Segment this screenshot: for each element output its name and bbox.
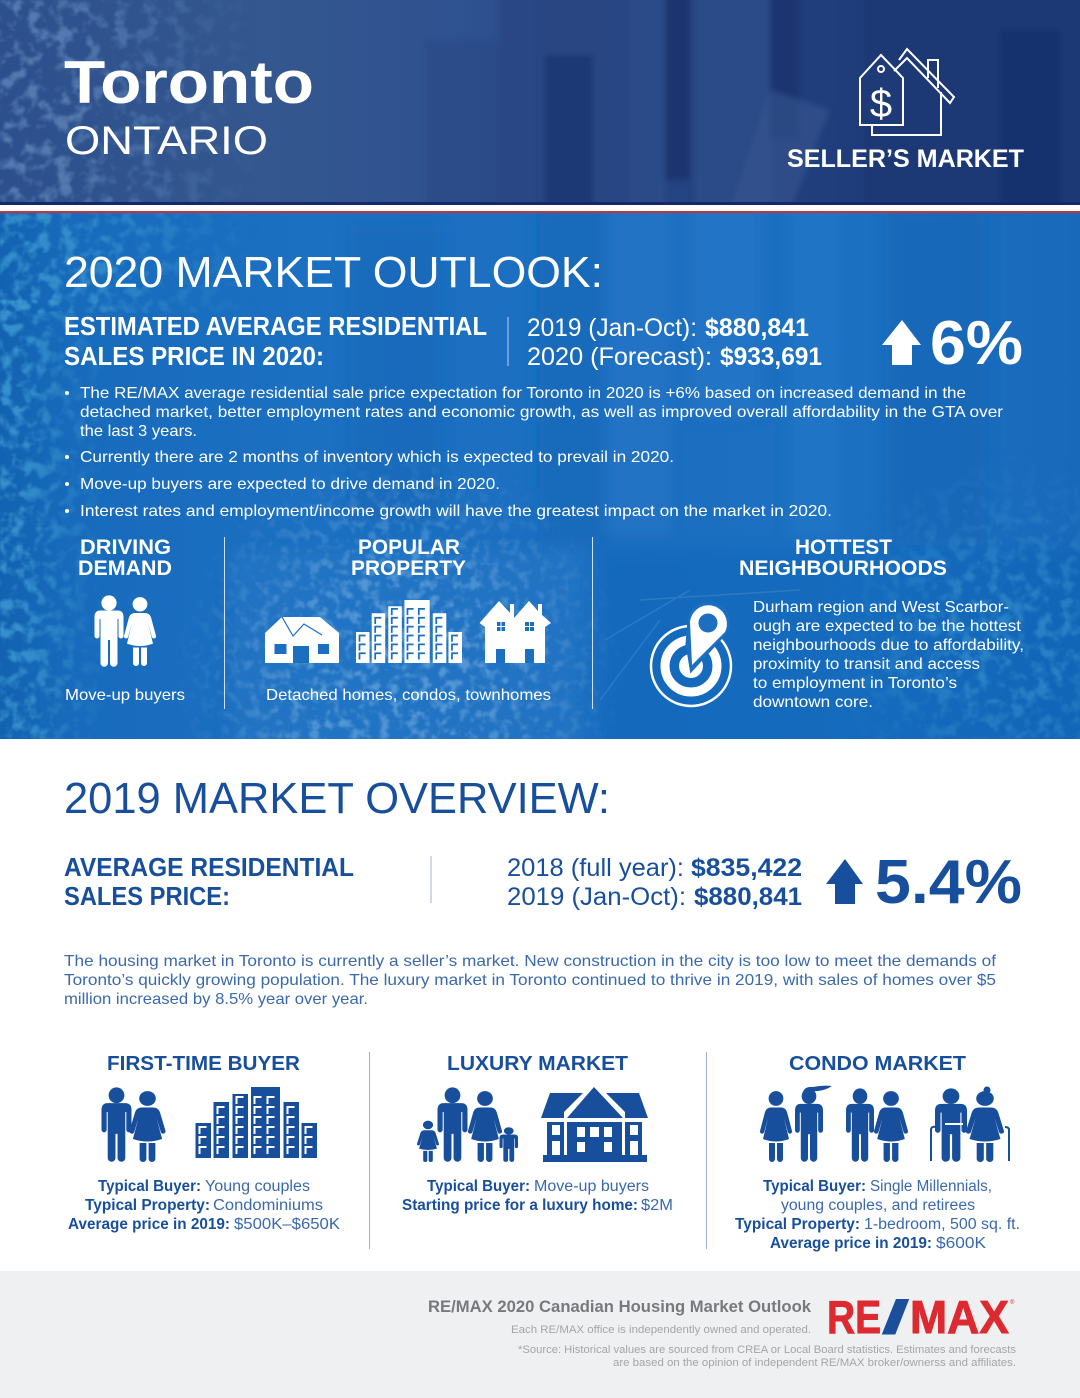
- average price label: SALES PRICE:: [64, 883, 230, 911]
- outlook bullet list: Currently there are 2 months of inventory which is expected to prevail in 2020.: [80, 449, 674, 466]
- details: Typical Buyer:: [763, 1178, 866, 1195]
- outlook bullet list: the last 3 years.: [80, 423, 197, 440]
- stat: 6 percent: 6%: [930, 309, 1023, 378]
- description: ough are expected to be the hottest: [753, 618, 1022, 635]
- heading: [739, 536, 947, 580]
- details: Starting price for a luxury home:: [402, 1197, 638, 1214]
- icon: up arrow: [882, 320, 921, 365]
- heading: CONDO MARKET: [789, 1052, 966, 1075]
- icon: couple: [94, 595, 156, 667]
- source note: are based on the opinion of independent RE/MAX broker/ownerss and affiliates.: [613, 1357, 1016, 1369]
- description: downtown core.: [753, 694, 873, 711]
- details: $600K: [936, 1235, 987, 1252]
- heading: DRIVING: [80, 536, 171, 559]
- details: Move-up buyers: [534, 1178, 649, 1195]
- panel: 2020 market outlook: [0, 205, 1080, 750]
- details: Average price in 2019:: [68, 1216, 230, 1233]
- description: proximity to transit and access: [753, 656, 980, 673]
- estimated average price label: ESTIMATED AVERAGE RESIDENTIAL: [64, 313, 487, 341]
- panel: header banner: [0, 0, 1080, 210]
- logo: RE/MAX: /: [882, 1291, 909, 1343]
- caption: Move-up buyers: [65, 687, 185, 704]
- tree foliage: [0, 0, 214, 202]
- details: $500K–$650K: [234, 1216, 341, 1233]
- icon: up arrow: [826, 859, 863, 904]
- price comparison: 2020 (Forecast):: [527, 343, 712, 371]
- price comparison: 2019 (Jan-Oct):: [507, 883, 686, 911]
- price comparison: 2019 (Jan-Oct):: [527, 314, 697, 342]
- outlook bullet list: [65, 385, 1004, 520]
- outlook bullet list: Move-up buyers are expected to drive demand in 2020.: [80, 476, 500, 493]
- photo background: [0, 205, 1080, 750]
- footer title: RE/MAX 2020 Canadian Housing Market Outlook: [428, 1298, 812, 1316]
- description: [753, 599, 1024, 711]
- icon: condo towers: [356, 600, 462, 663]
- average price label: AVERAGE RESIDENTIAL: [64, 854, 354, 882]
- icon: dollar sign: $: [870, 82, 892, 126]
- outlook bullet list: The RE/MAX average residential sale price expectation for Toronto in 2020 is +6% based on increased demand in the: [80, 385, 966, 402]
- overview paragraph: Toronto’s quickly growing population. The luxury market in Toronto continued to thrive in 2019, with sales of homes over $5: [64, 972, 996, 989]
- panel: first-time buyer: [68, 1052, 341, 1233]
- panel: luxury market: [402, 1052, 673, 1214]
- source note: [518, 1344, 1017, 1369]
- icon: retirees: [931, 1086, 1009, 1162]
- logo: RE/MAX: MAX: [910, 1291, 1009, 1343]
- logo: RE/MAX: RE: [827, 1291, 881, 1343]
- heading: [78, 536, 172, 580]
- title: [64, 49, 314, 163]
- heading: HOTTEST: [795, 536, 892, 559]
- heading: NEIGHBOURHOODS: [739, 557, 947, 580]
- details: Young couples: [205, 1178, 310, 1195]
- details: [68, 1178, 341, 1233]
- icon: map pin on target: [651, 604, 731, 706]
- icon: house with price tag: [860, 49, 954, 135]
- icon: detached house: [265, 617, 339, 663]
- price comparison: [527, 314, 822, 371]
- heading: 2019 market overview: 2019 MARKET OVERVIEW:: [64, 774, 610, 823]
- details: Typical Property:: [735, 1216, 860, 1233]
- heading: 2020 market outlook: 2020 MARKET OUTLOOK:: [64, 248, 603, 297]
- details: [402, 1178, 673, 1214]
- building facade: [0, 0, 1080, 210]
- caption: Detached homes, condos, townhomes: [266, 687, 551, 704]
- heading: PROPERTY: [351, 557, 466, 580]
- estimated average price label: SALES PRICE IN 2020:: [64, 343, 324, 371]
- details: Average price in 2019:: [770, 1235, 932, 1252]
- details: young couples, and retirees: [781, 1197, 975, 1214]
- icon: large house: [541, 1087, 648, 1162]
- price comparison: $880,841: [705, 314, 809, 342]
- description: to employment in Toronto’s: [753, 675, 957, 692]
- logo: RE/MAX: [827, 1291, 1015, 1343]
- heading: POPULAR: [358, 536, 460, 559]
- icon: condominium towers: [196, 1087, 317, 1158]
- icon: millennials: [760, 1086, 832, 1162]
- details: Typical Property:: [85, 1197, 210, 1214]
- title: ONTARIO: [65, 119, 268, 163]
- description: neighbourhoods due to affordability,: [753, 637, 1024, 654]
- price comparison: 2018 (full year):: [507, 854, 684, 882]
- title: Toronto: [64, 49, 314, 116]
- overview paragraph: million increased by 8.5% year over year.: [64, 991, 368, 1008]
- description: Durham region and West Scarbor-: [753, 599, 1009, 616]
- heading: LUXURY MARKET: [447, 1052, 628, 1075]
- details: Condominiums: [213, 1197, 323, 1214]
- details: Typical Buyer:: [427, 1178, 530, 1195]
- heading: [351, 536, 466, 580]
- stat: 5.4 percent: 5.4%: [875, 848, 1022, 917]
- icon: townhomes: [480, 601, 551, 663]
- market type label: SELLER’S MARKET: [787, 145, 1024, 173]
- estimated average price label: [64, 313, 487, 371]
- overview paragraph: The housing market in Toronto is currently a seller’s market. New construction in the city is too low to meet the demands of: [64, 953, 997, 970]
- outlook bullet list: Interest rates and employment/income growth will have the greatest impact on the market in 2020.: [80, 503, 832, 520]
- price comparison: $933,691: [720, 343, 822, 371]
- office disclaimer: Each RE/MAX office is independently owned and operated.: [511, 1324, 811, 1336]
- heading: DEMAND: [78, 557, 172, 580]
- price comparison: [507, 854, 802, 911]
- details: Typical Buyer:: [98, 1178, 201, 1195]
- panel: driving demand: [65, 536, 185, 704]
- overview paragraph: [64, 953, 997, 1008]
- price comparison: $880,841: [694, 883, 802, 911]
- tricolour divider: [0, 202, 1080, 214]
- panel: popular property: [265, 536, 551, 704]
- icon: family: [417, 1087, 518, 1162]
- details: $2M: [641, 1197, 673, 1214]
- icon: young couple: [846, 1088, 908, 1162]
- source note: *Source: Historical values are sourced from CREA or Local Board statistics. Estimates and forecasts: [518, 1344, 1017, 1356]
- logo: RE/MAX: ®: [1010, 1299, 1015, 1306]
- panel: condo market: [735, 1052, 1020, 1252]
- details: [735, 1178, 1020, 1252]
- details: 1-bedroom, 500 sq. ft.: [864, 1216, 1020, 1233]
- outlook bullet list: detached market, better employment rates and economic growth, as well as improved overall affordability in the GTA over: [80, 404, 1004, 421]
- price comparison: $835,422: [691, 854, 802, 882]
- panel: 2019 overview background: [0, 739, 1080, 1271]
- details: Single Millennials,: [870, 1178, 992, 1195]
- average price label: [64, 854, 354, 911]
- panel: hottest neighbourhoods: [651, 536, 1024, 711]
- panel: footer: [0, 1271, 1080, 1398]
- icon: young couple: [102, 1087, 166, 1162]
- heading: FIRST-TIME BUYER: [107, 1052, 300, 1075]
